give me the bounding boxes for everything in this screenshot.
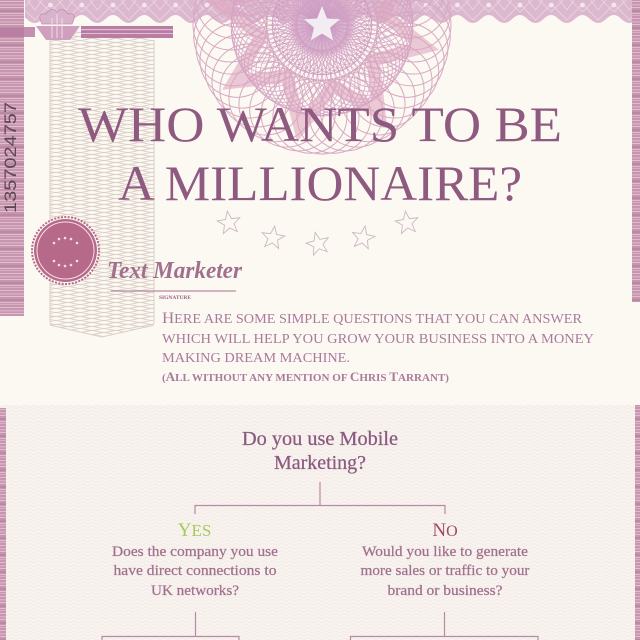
branch: no (360, 520, 530, 599)
intro text: HERE ARE SOME SIMPLE QUESTIONS THAT YOU CAN ANSWER (162, 310, 582, 327)
branch: no: more sales or traffic to your (360, 563, 530, 579)
intro text: MAKING DREAM MACHINE. (162, 350, 350, 365)
left barcode strip (0, 0, 24, 316)
title: WHO WANTS TO BE (78, 96, 562, 152)
certificate background (0, 0, 640, 405)
guilloche column (50, 30, 154, 337)
question heading (242, 428, 398, 474)
title (78, 96, 562, 211)
panel: flowchart (0, 405, 640, 640)
intro text (162, 310, 594, 384)
serial number: 1357024757 (1, 102, 20, 213)
signature: Text Marketer (107, 258, 243, 284)
seal (32, 217, 99, 284)
branch: no: brand or business? (388, 583, 503, 599)
connector: top split (195, 482, 445, 514)
intro text: (ALL WITHOUT ANY MENTION OF CHRIS TARRANT) (162, 370, 450, 384)
branch: no: NO (432, 520, 458, 541)
branch: yes: UK networks? (151, 583, 239, 599)
row of outline stars (216, 210, 420, 256)
right barcode strip (632, 0, 640, 302)
intro text: WHICH WILL HELP YOU GROW YOUR BUSINESS INTO A MONEY (162, 331, 594, 346)
branch: yes: Does the company you use (112, 544, 278, 560)
top scalloped border (25, 0, 632, 24)
signature: SIGNATURE (159, 296, 192, 301)
icon: star (304, 6, 340, 40)
branch: yes: have direct connections to (114, 563, 276, 579)
connector: no branch down (350, 612, 538, 640)
signature (107, 258, 243, 301)
question heading: Marketing? (274, 452, 366, 474)
title: A MILLIONAIRE? (118, 155, 522, 211)
connector: yes branch down (102, 612, 239, 640)
guilloche rosette with star (143, 0, 501, 200)
branch: yes (112, 520, 278, 599)
ornament: top-left crest and bars (24, 9, 173, 40)
question heading: Do you use Mobile (242, 428, 398, 450)
branch: yes: YES (178, 520, 211, 541)
branch: no: Would you like to generate (362, 544, 528, 560)
